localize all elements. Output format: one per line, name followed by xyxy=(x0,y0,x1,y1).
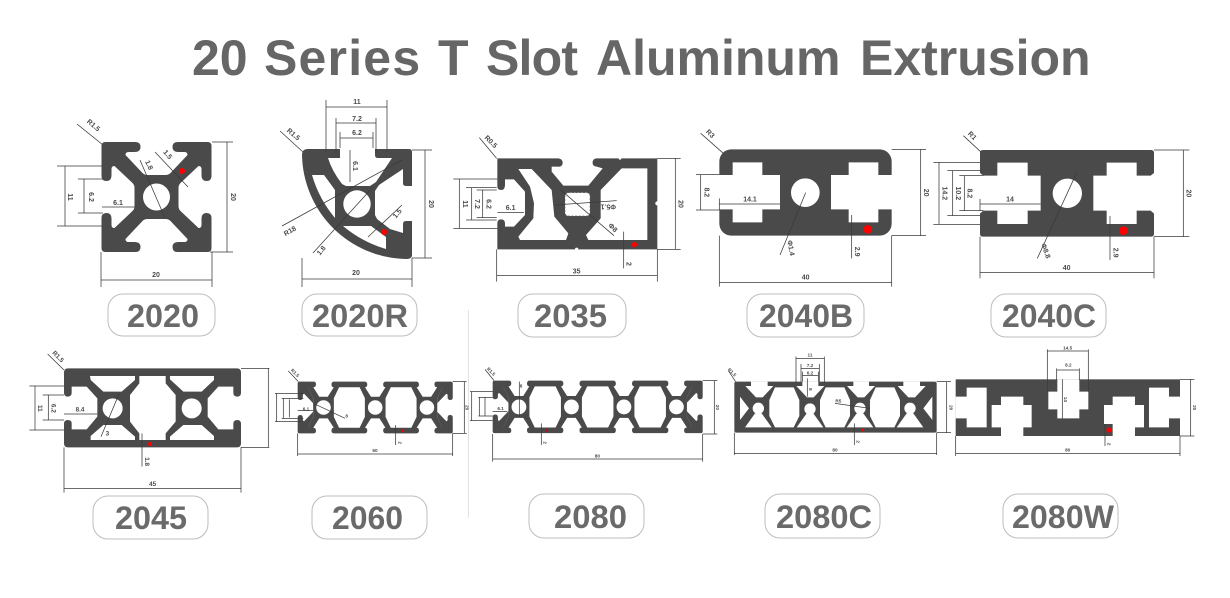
red marker 2080C xyxy=(861,429,864,431)
dimensions 2080C xyxy=(727,352,953,455)
dimensions 2020R: 20 xyxy=(352,270,360,277)
dimensions 2080C: 8 xyxy=(808,388,813,391)
title: Slot xyxy=(486,30,590,86)
dimensions 2040B: Φ1.4 xyxy=(785,240,795,256)
dimensions 2080W: 14.5 xyxy=(1063,345,1073,350)
label: 2060: 2060 xyxy=(332,500,403,536)
dimensions 2040B: R3 xyxy=(704,129,715,140)
red marker 2080 xyxy=(545,429,548,432)
label: 2080C xyxy=(765,494,880,538)
dimensions 2080C: R1.5 xyxy=(727,367,738,378)
panel: 2080 profile xyxy=(470,366,720,462)
title: Extrusion xyxy=(860,30,1091,86)
label: 2080C: 2080C xyxy=(776,499,872,535)
dimensions 2035: 7.2 xyxy=(473,199,480,209)
panel: 2080W profile xyxy=(956,345,1197,456)
dimensions 2045: 8.4 xyxy=(76,407,85,414)
dimensions 2020R: R18 xyxy=(283,225,298,238)
divider xyxy=(468,310,469,518)
red marker 2020 xyxy=(179,168,185,174)
dimensions 2060: 8 xyxy=(345,413,348,418)
dimensions 2080: R1.5 xyxy=(486,366,497,377)
red marker 2045 xyxy=(148,442,152,446)
red marker 2040C xyxy=(1119,226,1128,235)
dimensions 2080C: 2 xyxy=(855,440,860,443)
label: 2020: 2020 xyxy=(127,298,199,334)
title: T xyxy=(438,30,482,86)
panel: 2080C profile xyxy=(727,352,953,455)
dimensions 2035: 20 xyxy=(677,200,684,208)
label: 2020 xyxy=(108,294,215,336)
dimensions 2020: 20 xyxy=(229,193,236,201)
dimensions 2080C: 7.2 xyxy=(807,363,814,368)
dimensions 2080: 20 xyxy=(715,405,720,410)
label: 2040C xyxy=(991,294,1106,337)
dimensions 2035: Φ5.1 xyxy=(601,202,616,209)
red marker 2080W xyxy=(1106,427,1112,433)
profile shape 2080C xyxy=(734,382,937,433)
dimensions 2020R: R1.5 xyxy=(285,127,301,142)
label: 2040B xyxy=(747,294,864,337)
red marker 2060 xyxy=(401,429,404,432)
dimensions 2040B: 2.9 xyxy=(853,247,860,257)
profile shape 2080W xyxy=(956,379,1180,436)
title: Aluminum xyxy=(596,30,854,86)
dimensions 2080: 80 xyxy=(595,453,600,458)
dimensions 2035: 6.2 xyxy=(484,199,491,209)
panel: 2060 profile xyxy=(275,368,470,456)
dimensions 2020 xyxy=(57,118,236,287)
dimensions 2045 xyxy=(29,350,269,493)
dimensions 2020: 20 xyxy=(152,272,160,279)
dimensions 2045: 11 xyxy=(36,405,43,412)
dimensions 2080W: 80 xyxy=(1065,448,1071,453)
dimensions 2035: 6.1 xyxy=(506,205,516,212)
label: 2040B: 2040B xyxy=(759,298,853,334)
dimensions 2040B: 20 xyxy=(922,189,929,197)
dimensions 2040C: 8.2 xyxy=(965,188,972,198)
dimensions 2080W xyxy=(956,345,1197,456)
dimensions 2045: R1.5 xyxy=(51,350,65,364)
red marker 2020R xyxy=(381,229,387,235)
dimensions 2080: 8 xyxy=(520,383,523,388)
label: 2040C: 2040C xyxy=(1002,298,1096,334)
panel: 2040C profile xyxy=(933,131,1192,278)
profile shape 2035 xyxy=(497,157,659,251)
dimensions 2020R: 1.5 xyxy=(392,208,404,220)
label: 2020R: 2020R xyxy=(312,298,408,334)
dimensions 2080: 6.1 xyxy=(497,406,504,411)
dimensions 2035: 35 xyxy=(573,268,581,275)
dimensions 2035: Φ8 xyxy=(607,222,618,234)
label: 2035: 2035 xyxy=(534,298,607,334)
dimensions 2040C: 14.2 xyxy=(940,187,947,200)
profile shape 2045 xyxy=(64,368,241,447)
dimensions 2080C: 80 xyxy=(832,447,838,452)
dimensions 2080W: 14 xyxy=(1063,397,1068,402)
dimensions 2040C: 10.2 xyxy=(954,187,961,200)
panel: 2020R profile xyxy=(280,99,434,287)
dimensions 2020: 6.1 xyxy=(113,200,123,207)
dimensions 2080C: 11 xyxy=(808,352,813,357)
red marker 2040B xyxy=(863,225,872,234)
panel: 2035 profile xyxy=(453,135,684,282)
profile shape 2060 xyxy=(298,382,453,433)
profile shape 2020 xyxy=(102,142,212,252)
dimensions 2060 xyxy=(275,368,470,456)
profile shape 2040C xyxy=(978,150,1156,237)
dimensions 2040C: 20 xyxy=(1185,189,1192,197)
dimensions 2040C xyxy=(933,131,1192,278)
profile shape 2040B xyxy=(719,149,892,236)
dimensions 2080 xyxy=(470,366,720,462)
dimensions 2020: 6.2 xyxy=(87,192,94,202)
panel: 2045 profile xyxy=(29,350,269,493)
dimensions 2060: 20 xyxy=(465,405,470,411)
dimensions 2040C: 2.9 xyxy=(1111,248,1118,258)
dimensions 2020: 1.8 xyxy=(143,159,154,171)
dimensions 2040C: R1 xyxy=(966,131,977,142)
dimensions 2020: R1.5 xyxy=(85,118,101,133)
dimensions 2080W: 8.2 xyxy=(1065,363,1072,368)
dimensions 2045: 1.8 xyxy=(143,457,150,467)
profile shape 2080 xyxy=(493,381,703,433)
panel: 2040B profile xyxy=(696,129,929,287)
dimensions 2060: 60 xyxy=(372,448,378,453)
dimensions 2060: 2 xyxy=(397,441,402,444)
label: 2045: 2045 xyxy=(115,500,187,536)
label: 2080: 2080 xyxy=(554,499,627,535)
title: Series xyxy=(264,30,436,86)
dimensions 2060: 6.1 xyxy=(303,407,310,412)
label: 2080 xyxy=(529,494,644,538)
dimensions 2080C: R5 xyxy=(835,398,842,403)
dimensions 2040B: 40 xyxy=(802,275,810,282)
dimensions 2045: 3 xyxy=(106,430,110,437)
dimensions 2080W: 2 xyxy=(1106,443,1111,446)
label: 2080W: 2080W xyxy=(1012,499,1115,535)
dimensions 2020R: 6.1 xyxy=(351,161,358,171)
dimensions 2040B: 14.1 xyxy=(743,196,757,203)
profile shape 2020R xyxy=(302,149,412,259)
dimensions 2040B: 8.2 xyxy=(702,187,709,197)
dimensions 2060: R1.5 xyxy=(290,368,301,378)
dimensions 2020R: 7.2 xyxy=(352,116,362,123)
dimensions 2045: 6.2 xyxy=(50,404,57,413)
dimensions 2035: R0.5 xyxy=(483,135,498,150)
dimensions 2035 xyxy=(453,135,684,282)
dimensions 2040B xyxy=(696,129,929,287)
label: 2045 xyxy=(93,496,208,539)
dimensions 2020R: 6.2 xyxy=(352,130,362,137)
dimensions 2045: 45 xyxy=(149,481,157,488)
dimensions 2020: 11 xyxy=(66,193,73,201)
dimensions 2035: 2 xyxy=(625,262,632,266)
dimensions 2020R xyxy=(280,99,434,287)
dimensions 2020R: 1.8 xyxy=(316,245,328,257)
dimensions 2040C: Φ8.8 xyxy=(1039,243,1051,260)
dimensions 2020R: 11 xyxy=(353,99,361,106)
dimensions 2020: 1.5 xyxy=(161,149,173,161)
title: 20 xyxy=(192,30,262,86)
label: 2035 xyxy=(518,294,626,337)
dimensions 2080W: 20 xyxy=(1192,405,1197,411)
dimensions 2040C: 14 xyxy=(1006,197,1014,204)
red marker 2035 xyxy=(632,242,637,247)
label: 2060 xyxy=(312,496,427,539)
dimensions 2020R: 20 xyxy=(427,200,434,208)
dimensions 2080C: 6.2 xyxy=(807,371,814,376)
dimensions 2035: 11 xyxy=(461,200,468,208)
dimensions 2080: 2 xyxy=(542,441,547,444)
dimensions 2080C: 20 xyxy=(948,405,953,411)
panel: 2020 profile xyxy=(57,118,236,287)
dimensions 2040C: 40 xyxy=(1063,265,1071,272)
